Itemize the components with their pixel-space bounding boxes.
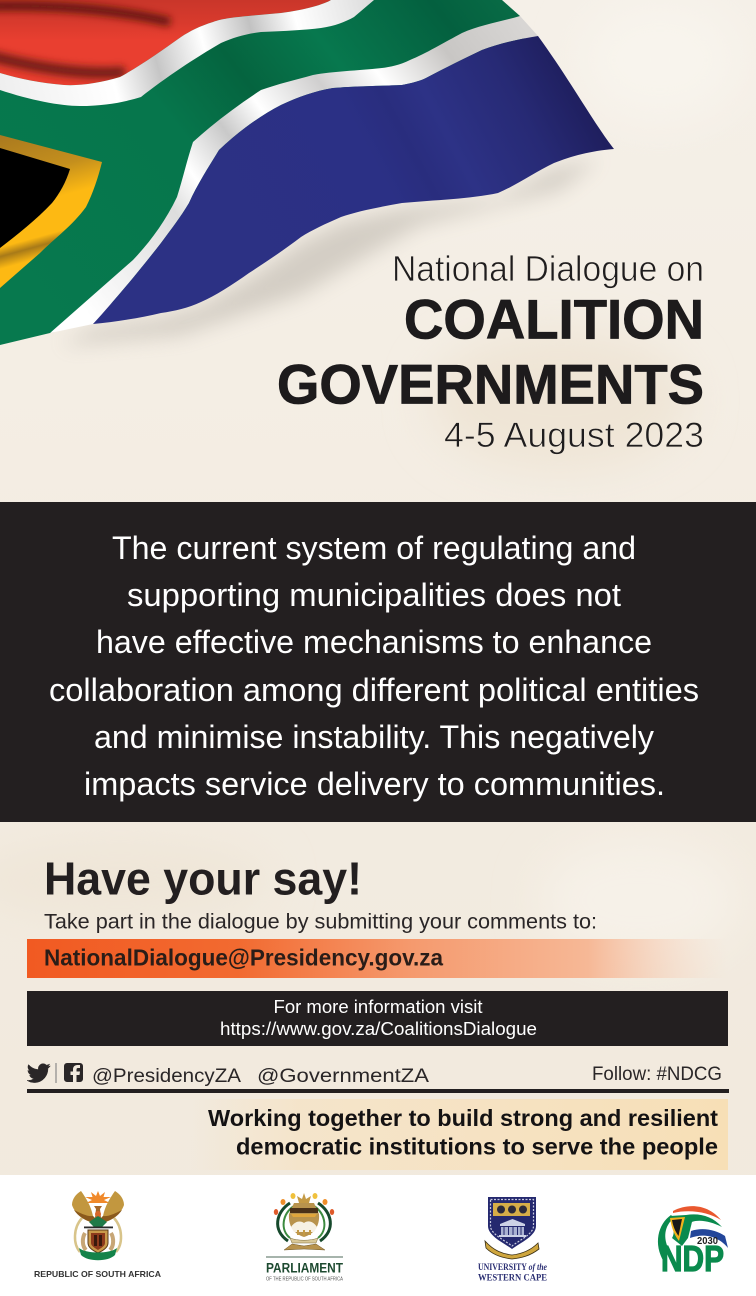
icon: twitter xyxy=(27,1064,50,1083)
yellow triangle xyxy=(670,1217,685,1241)
divider xyxy=(56,1063,57,1083)
right wing xyxy=(100,1191,124,1222)
statement text: collaboration among different political entities xyxy=(49,672,699,708)
footer logo strip xyxy=(0,1175,756,1296)
text: 2030: 2030 xyxy=(697,1235,718,1247)
flag: upper white band xyxy=(0,0,374,106)
flag: blue band xyxy=(93,36,614,324)
flag: gold chevron xyxy=(0,135,102,288)
handle: presidency: @PresidencyZA xyxy=(92,1065,241,1087)
reeds xyxy=(278,1203,290,1241)
green circle arc xyxy=(658,1215,674,1262)
text: Republic of South Africa: REPUBLIC OF SOUTH AFRICA xyxy=(34,1269,161,1279)
email banner xyxy=(27,939,728,978)
panel: more information: For more information visit xyxy=(274,996,482,1017)
title line: Governments: GOVERNMENTS xyxy=(277,352,704,416)
slogan banner: Working together to build strong and resilient xyxy=(208,1105,718,1131)
shield with border xyxy=(488,1197,536,1249)
blue stripe xyxy=(690,1229,728,1248)
white stripe xyxy=(691,1221,724,1235)
flag: lower white band xyxy=(50,16,538,333)
logo: University of the Western Cape xyxy=(485,1197,539,1259)
statement text xyxy=(49,530,699,802)
logo: NDP 2030 xyxy=(658,1206,728,1279)
statement text: The current system of regulating and xyxy=(112,530,636,566)
text: University of the Western Cape xyxy=(478,1262,547,1282)
sun crown xyxy=(297,1193,311,1203)
shield xyxy=(88,1230,108,1253)
green ribbon xyxy=(79,1248,117,1260)
spear and knobkierie xyxy=(84,1226,113,1228)
text: invitation to comment: Take part in the dialogue by submitting your comments to: xyxy=(44,910,597,934)
statement text: impacts service delivery to communities. xyxy=(84,766,665,802)
pot xyxy=(289,1203,319,1237)
flag: red band xyxy=(0,0,340,90)
statement text: have effective mechanisms to enhance xyxy=(96,624,652,660)
black triangle xyxy=(672,1219,682,1236)
title line: National Dialogue on: National Dialogue on xyxy=(392,248,704,289)
slogan banner xyxy=(190,1099,728,1170)
slogan banner: democratic institutions to serve the people xyxy=(236,1134,718,1160)
left wing xyxy=(72,1191,96,1222)
secretary bird body xyxy=(94,1206,102,1218)
title line: Coalition: COALITION xyxy=(404,288,704,350)
rule under parliament logo xyxy=(266,1256,343,1258)
text: University of the Western Cape: UNIVERSITY of the xyxy=(478,1262,547,1272)
protea xyxy=(89,1216,107,1227)
hashtag: Follow: #NDCG xyxy=(592,1064,722,1085)
ribbon xyxy=(290,1238,318,1243)
text: Parliament: PARLIAMENT xyxy=(266,1260,344,1276)
gold band xyxy=(493,1203,530,1216)
flag shadow xyxy=(60,158,600,345)
title xyxy=(277,248,704,455)
social media row xyxy=(27,1063,722,1087)
text: of the Republic of South Africa: OF THE REPUBLIC OF SOUTH AFRICA xyxy=(266,1276,344,1282)
statement text: supporting municipalities does not xyxy=(127,577,621,613)
wreath arcs xyxy=(75,1218,82,1252)
red arc xyxy=(673,1206,721,1220)
event date: 4-5 August 2023 xyxy=(444,416,704,455)
sun xyxy=(85,1191,111,1203)
icon: facebook xyxy=(64,1063,83,1082)
South African flag xyxy=(0,0,614,345)
statement text: and minimise instability. This negatively xyxy=(94,719,654,755)
email banner: NationalDialogue@Presidency.gov.za xyxy=(44,944,443,970)
building xyxy=(500,1219,525,1226)
text: University of the Western Cape: WESTERN CAPE xyxy=(478,1272,547,1282)
logo: Republic of South Africa coat of arms xyxy=(72,1191,124,1260)
heading: have your say: Have your say! xyxy=(44,852,362,904)
logo: Parliament xyxy=(274,1193,334,1250)
gold scroll xyxy=(485,1241,539,1259)
handle: government: @GovernmentZA xyxy=(257,1065,429,1087)
text: NDP: NDP xyxy=(661,1238,724,1279)
open book xyxy=(284,1244,325,1250)
panel: more information xyxy=(27,991,728,1046)
flowers xyxy=(290,1193,296,1199)
green flag wedge xyxy=(670,1214,722,1246)
flag: green field xyxy=(0,0,525,345)
panel: more information: https://www.gov.za/CoalitionsDialogue xyxy=(220,1018,537,1039)
panel: problem statement xyxy=(0,502,756,822)
flag: black triangle xyxy=(0,148,70,248)
